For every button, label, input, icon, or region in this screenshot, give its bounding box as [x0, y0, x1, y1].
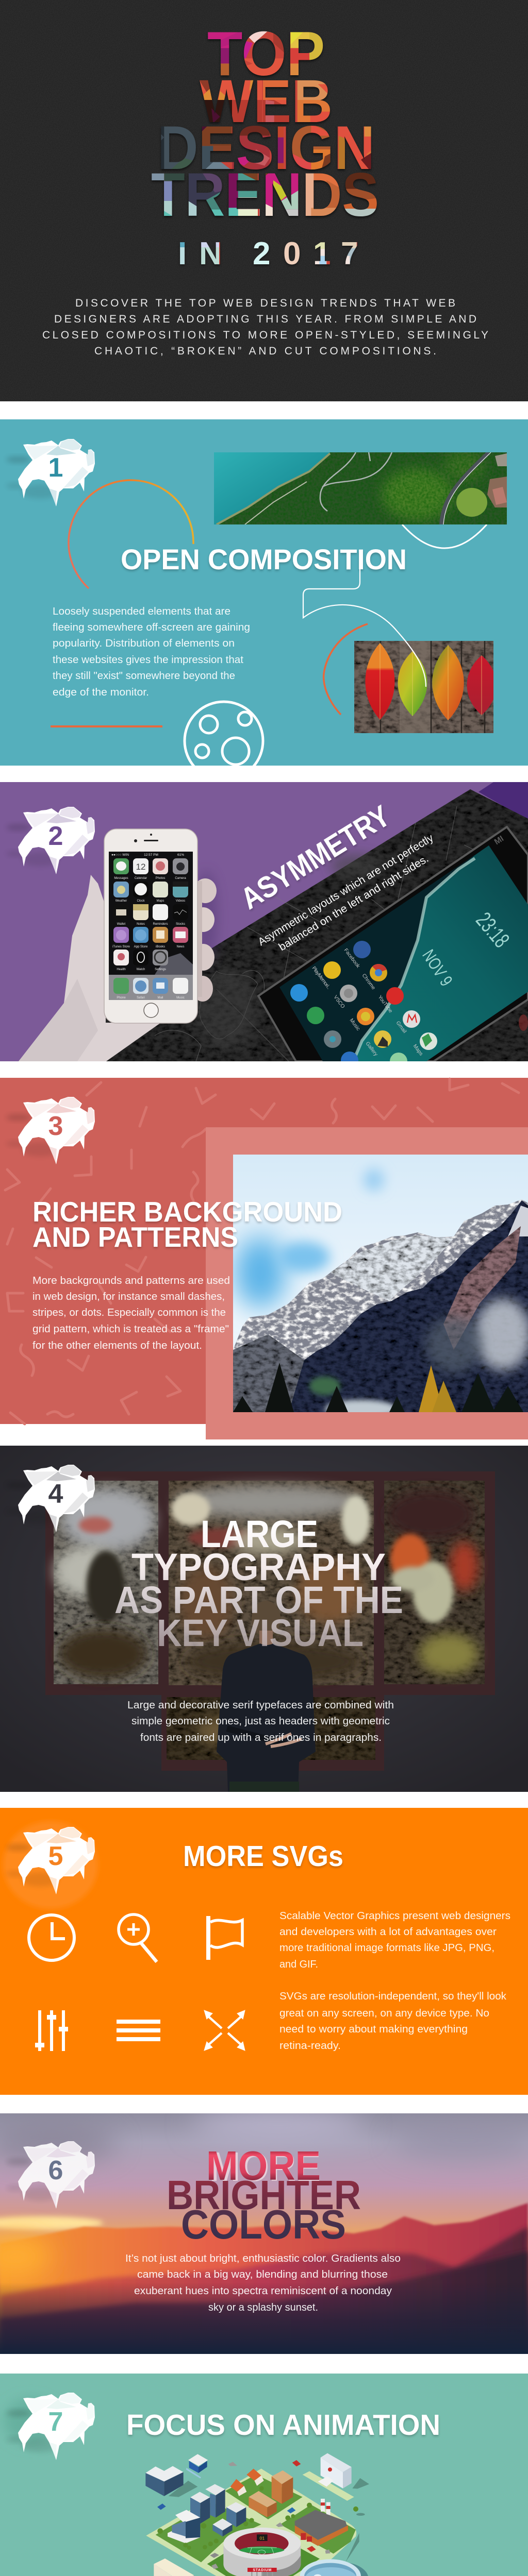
paragraph: fonts are paired up with a serif ones in paragraphs.: [140, 1732, 382, 1743]
iphone body: Mail: [157, 996, 163, 999]
panel: 2 asymmetry: [0, 782, 528, 1070]
phone: android mockup: Music: [349, 1018, 361, 1032]
panel: 3 richer background and patterns: [0, 1078, 528, 1439]
badge: number 7: 7: [48, 2407, 63, 2437]
iphone body: Calendar: [135, 877, 147, 880]
heading: large typography as part of the key visual: [114, 1513, 403, 1654]
bar: orange rule: [51, 725, 162, 727]
iphone body: Stocks: [176, 923, 185, 926]
title: top web design trends: WEB: [200, 67, 333, 135]
paragraph: svg advantages: and GIF.: [279, 1959, 318, 1970]
iphone body: Maps: [157, 900, 164, 903]
paragraph: rotated: balanced on the left and right sides.: [277, 853, 431, 953]
phone: android mockup: Gallery: [365, 1041, 378, 1057]
paragraph: rotated: Asymmetric layouts which are not perfectly: [256, 832, 436, 948]
iphone body: News: [176, 945, 185, 948]
badge: number 5: [6, 1827, 95, 1894]
phone: android mockup: YouTube: [377, 994, 393, 1014]
corner: dark purple: [478, 782, 528, 820]
paragraph: popularity. Distribution of elements on: [53, 638, 235, 649]
iphone body: iBooks: [156, 945, 165, 948]
paragraph: svg advantages: and developers with a lot of advantages over: [279, 1926, 497, 1938]
phone: android mockup: Chrome: [361, 973, 376, 991]
paragraph: resolution independence: retina-ready.: [279, 2040, 341, 2052]
heading: more brighter colors: [167, 2143, 361, 2247]
panel: 4 large typography: [0, 1446, 528, 1792]
hospital: [303, 2453, 354, 2501]
ground plan: [146, 2469, 356, 2576]
phone: android mockup: 23:18: [471, 908, 514, 953]
icon: expand arrows: [204, 2010, 245, 2050]
glow behind badge: [3, 1821, 98, 1909]
phone: android mockup: NOV 9: [418, 946, 456, 990]
iphone body: Weather: [116, 900, 127, 903]
photo: hand holding iphone: [19, 829, 218, 1061]
heading: richer background and patterns: RICHER BACKGROUND: [32, 1196, 342, 1228]
heading: more brighter colors: BRIGHTER: [167, 2172, 361, 2218]
magnifying glass: [257, 2559, 369, 2576]
paragraph: svg advantages: Scalable Vector Graphics present web designers: [279, 1910, 510, 1922]
factory: [295, 2499, 348, 2546]
iphone body: 12: [136, 862, 145, 872]
paragraph: [53, 606, 250, 698]
badge: number 5: 5: [48, 1841, 63, 1871]
paragraph: edge of the monitor.: [53, 687, 149, 698]
paragraph: [125, 2253, 401, 2313]
phone: android mockup: VSCO: [333, 994, 346, 1010]
iphone body: [104, 829, 197, 1023]
trees, cars and rocks: [157, 2460, 365, 2576]
badge: number 2: [6, 807, 95, 874]
iphone body: Messages: [114, 877, 128, 880]
intro paragraph: CLOSED COMPOSITIONS TO MORE OPEN-STYLED, SEEMINGLY: [42, 329, 488, 341]
iphone body: Wallet: [117, 923, 126, 926]
heading: richer background and patterns: [32, 1196, 342, 1253]
pattern: dashes and chevrons: [5, 1079, 519, 1424]
paragraph: [32, 1275, 230, 1351]
heading: open composition: OPEN COMPOSITION: [121, 543, 407, 575]
stadium: STADIUM: [253, 2569, 272, 2572]
heading: large typography as part of the key visual: KEY VISUAL: [157, 1612, 364, 1654]
illustration: isometric city: [145, 2453, 369, 2576]
iphone body: Photos: [156, 877, 165, 880]
iphone body: 12:57 PM: [144, 853, 158, 857]
shops and civic buildings: [154, 2454, 352, 2576]
icon: moon circles: [184, 701, 264, 766]
heading: more brighter colors: MORE: [209, 2144, 321, 2190]
heading: focus on animation: FOCUS ON ANIMATION: [126, 2409, 440, 2442]
iphone body: Videos: [176, 900, 185, 903]
intro paragraph: [42, 297, 488, 357]
panel: 7 focus on animation: [0, 2374, 528, 2576]
iphone body: Health: [117, 968, 126, 971]
paragraph: they still "exist" somewhere beyond the: [53, 670, 235, 682]
office buildings: [145, 2466, 246, 2544]
heading: more brighter colors: COLORS: [181, 2201, 346, 2247]
icon: flag: [208, 1916, 242, 1960]
heading: more brighter colors: MORE: [206, 2143, 321, 2189]
paragraph: Loosely suspended elements that are: [53, 606, 230, 617]
paragraph: came back in a big way, blending and blurring those: [137, 2269, 388, 2280]
panel: 6 more brighter colors: [0, 2111, 528, 2354]
badge: number 6: [6, 2141, 95, 2209]
iphone body: 61%: [177, 853, 184, 857]
badge: number 1: 1: [48, 453, 63, 483]
subtitle: in 2017: IN2017: [178, 236, 358, 272]
panel: 1 open composition: [0, 419, 528, 780]
paintings: triptych: [45, 1471, 495, 1771]
intro paragraph: DESIGNERS ARE ADOPTING THIS YEAR. FROM SIMPLE AND: [54, 313, 476, 325]
intro paragraph: DISCOVER THE TOP WEB DESIGN TRENDS THAT WEB: [75, 297, 455, 309]
heading: richer background and patterns: AND PATTERNS: [32, 1221, 238, 1253]
paragraph: resolution independence: great on any screen, on any device type. No: [279, 2008, 489, 2019]
paragraph: fleeing somewhere off-screen are gaining: [53, 622, 250, 633]
iphone body: ●●○○○ WIN: [111, 853, 129, 857]
iphone body: App Store: [134, 945, 148, 948]
line: white connector: [303, 569, 426, 687]
phone: android mockup: Gmail: [395, 1020, 407, 1035]
paragraph: svg advantages: more traditional image formats like JPG, PNG,: [279, 1942, 494, 1954]
badge: number 4: [6, 1465, 95, 1532]
heading: more svgs: MORE SVGs: [183, 1840, 343, 1873]
paragraph: these websites gives the impression that: [53, 654, 243, 666]
icon: clock: [29, 1915, 74, 1960]
title: top web design trends: [151, 19, 379, 229]
photo: aerial coast road: [214, 451, 507, 524]
badge: number 2: 2: [48, 821, 63, 851]
phone: android mockup: [258, 827, 528, 1070]
title: top web design trends: TRENDS: [151, 160, 379, 229]
paragraph: svg advantages: [279, 1910, 510, 1970]
badge: number 4: 4: [48, 1479, 63, 1509]
photo: autumn leaves on wood: [354, 641, 496, 733]
paragraph: stripes, or dots. Especially common is the: [32, 1307, 226, 1318]
stadium: 01: [260, 2536, 265, 2541]
paragraph: exuberant hues into spectra reminiscent of a noonday: [134, 2285, 392, 2297]
iphone body: Music: [176, 996, 185, 999]
icon: magnifier plus: [119, 1914, 157, 1962]
photo: man from behind: [217, 1601, 316, 1792]
panel: lighter frame: [206, 1127, 528, 1439]
stadium: [223, 2528, 301, 2576]
paragraph: sky or a splashy sunset.: [208, 2302, 318, 2313]
paragraph: resolution independence: need to worry about making everything: [279, 2024, 468, 2035]
phone: android mockup: PlayMemori..: [311, 965, 332, 990]
iphone body: Notes: [137, 923, 145, 926]
phone: android mockup: MI: [493, 834, 505, 846]
paragraph: in web design, for instance small dashes,: [32, 1291, 225, 1302]
badge: number 6: 6: [48, 2156, 63, 2185]
badge: number 3: [6, 1097, 95, 1164]
paragraph: More backgrounds and patterns are used: [32, 1275, 230, 1286]
heading: large typography as part of the key visual: TYPOGRAPHY: [131, 1546, 386, 1588]
icon: sliders: [35, 2010, 68, 2051]
shadows: [169, 2478, 369, 2576]
paragraph: resolution independence: [279, 1991, 507, 2052]
paragraph: resolution independence: SVGs are resolution-independent, so they'll look: [279, 1991, 507, 2002]
icon: hamburger menu: [117, 2020, 160, 2041]
orange buildings and houses: [230, 2469, 293, 2517]
panel: 5 more svgs: [0, 1808, 528, 2095]
paragraph: for the other elements of the layout.: [32, 1340, 202, 1351]
arc: orange right: [324, 624, 368, 715]
mountains: [0, 2203, 528, 2354]
paragraph: grid pattern, which is treated as a "frame": [32, 1324, 229, 1335]
badge shadow: [4, 2399, 58, 2444]
title: top web design trends: DESIGN: [157, 113, 375, 182]
panel: header: [0, 0, 528, 401]
iphone body: Watch: [137, 968, 145, 971]
iphone body: Settings: [155, 968, 166, 971]
intro paragraph: CHAOTIC, “BROKEN” AND CUT COMPOSITIONS.: [94, 345, 436, 357]
paragraph: Large and decorative serif typefaces are combined with: [127, 1700, 394, 1711]
iphone body: Safari: [137, 996, 145, 999]
arc: white below photo: [402, 524, 487, 548]
iphone body: Camera: [175, 877, 186, 880]
badge: number 3: 3: [48, 1111, 63, 1141]
iphone body: Clock: [137, 900, 145, 903]
photo: snowy mountain: [233, 1155, 528, 1418]
badge: number 7: [6, 2393, 95, 2460]
arc: orange gradient: [69, 480, 193, 588]
photo: dark map background: [106, 789, 528, 1061]
title: top web design trends: TOP: [207, 19, 325, 89]
phone: android mockup: Maps: [412, 1043, 424, 1057]
heading: large typography as part of the key visual: AS PART OF THE: [114, 1579, 403, 1621]
phone: android mockup: Facebook: [343, 947, 361, 970]
paragraph: simple geometric ones, just as headers with geometric: [131, 1716, 390, 1727]
iphone body: iTunes Store: [112, 945, 130, 948]
badge: number 1: [6, 439, 95, 506]
iphone body: Phone: [117, 996, 126, 999]
iphone body: Reminders: [153, 923, 168, 926]
paragraph: It’s not just about bright, enthusiastic color. Gradients also: [125, 2253, 401, 2264]
paragraph: [127, 1700, 394, 1743]
heading: large typography as part of the key visual: LARGE: [201, 1513, 318, 1555]
heading: asymmetry: ASYMMETRY: [235, 799, 396, 916]
